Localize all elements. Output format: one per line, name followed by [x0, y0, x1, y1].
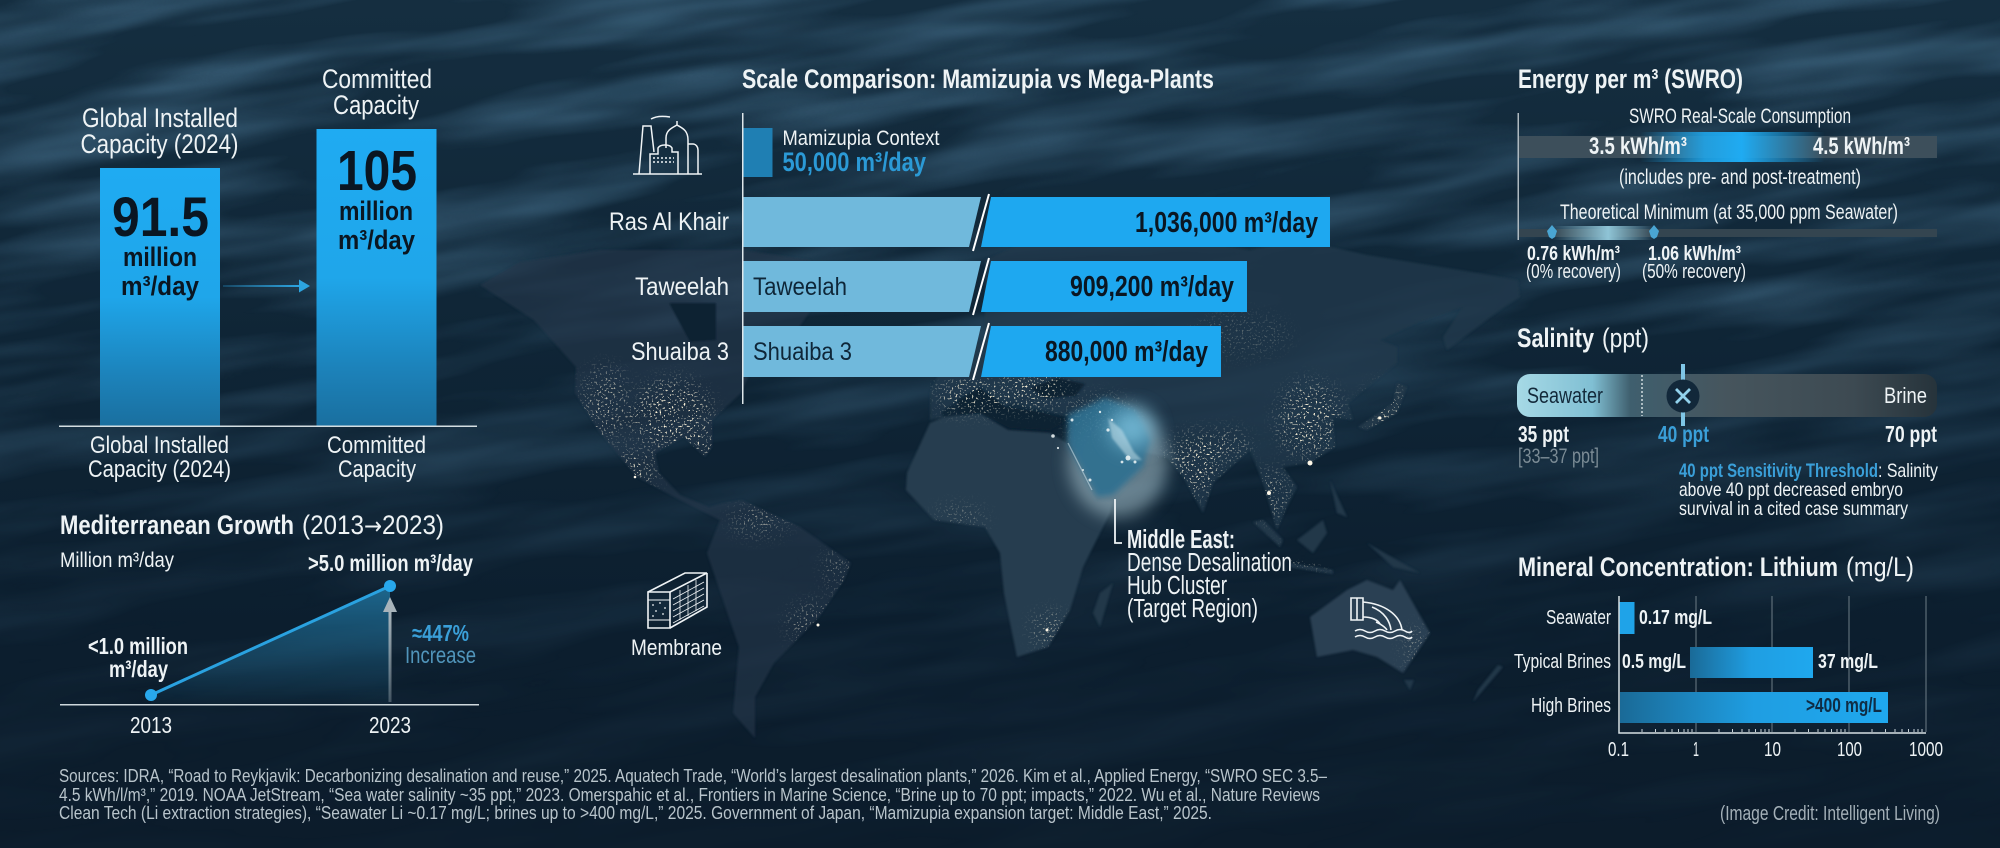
right panel: lithium concentration — [1514, 552, 1943, 761]
value labels: >5.0 million m³/day — [308, 550, 473, 576]
log bar chart: 1000 — [1909, 738, 1943, 761]
threshold note: above 40 ppt decreased embryo — [1679, 479, 1903, 501]
label above bar 1 — [80, 103, 238, 159]
increase callout: ≈447% — [412, 620, 469, 646]
bar: committed capacity: m³/day — [338, 225, 415, 255]
heading: Salinity — [1517, 323, 1594, 353]
label above bar 2: Committed — [322, 64, 432, 94]
increase callout: Increase — [405, 642, 476, 668]
log bar chart: 1 — [1693, 738, 1699, 761]
map: brightest cities — [634, 416, 1382, 632]
year labels — [130, 712, 411, 738]
log bar chart: High Brines — [1531, 694, 1611, 717]
bar: Mamizupia context — [744, 127, 940, 177]
callout: Middle East: Dense Desalination — [1127, 549, 1292, 577]
year labels: 2013 — [130, 712, 172, 738]
bar: Mamizupia context: 50,000 m³/day — [782, 147, 926, 177]
line chart — [60, 580, 479, 706]
log bar chart — [1514, 596, 1943, 761]
axis labels: Global Installed — [90, 432, 229, 459]
range bar: theoretical minimum: (0% recovery) — [1526, 260, 1621, 283]
scale value labels: 35 ppt — [1518, 421, 1569, 447]
log bar chart: Typical Brines — [1514, 650, 1611, 673]
threshold marker — [1666, 364, 1700, 426]
sources: Sources: IDRA, “Road to Reykjavik: Decarbonizing desalination and reuse,” 2025. Aquatech Trade, “World’s largest desalination plants,” 2026. Kim et al., Applied Energy, “SWRO SEC 3.5– — [59, 766, 1327, 786]
world map at night — [483, 247, 1512, 736]
range bar: theoretical minimum: (50% recovery) — [1642, 260, 1746, 283]
callout: Middle East: Hub Cluster — [1127, 572, 1227, 600]
range bar: theoretical minimum — [1519, 200, 1937, 283]
bar: Ras Al Khair: 1,036,000 m³/day — [1135, 207, 1318, 239]
range bar: theoretical minimum: 0.76 kWh/m³ — [1527, 242, 1620, 265]
axis labels — [88, 432, 426, 483]
scale value labels — [1518, 421, 1937, 468]
bar: global installed capacity: 91.5 — [112, 185, 209, 248]
left panel: capacity bar chart — [59, 64, 477, 483]
heading: Energy per m³ (SWRO) — [1518, 64, 1743, 94]
bar: Ras Al Khair — [609, 194, 1330, 251]
log bar chart: 0.1 — [1608, 738, 1629, 761]
icon: membrane: Membrane — [631, 635, 722, 660]
center panel: scale comparison — [609, 64, 1330, 404]
map: Middle East highlight glow — [1051, 398, 1168, 518]
bar: global installed capacity — [100, 168, 220, 426]
right panel: salinity — [1517, 323, 1938, 520]
heading: (2013→2023) — [302, 510, 444, 540]
range bar: theoretical minimum: 1.06 kWh/m³ — [1648, 242, 1741, 265]
range bar: real-scale consumption: 3.5 kWh/m³ — [1589, 133, 1687, 160]
bar: committed capacity: million — [339, 196, 413, 226]
icon: brine outfall pipe — [1351, 598, 1412, 638]
icon: desalination plant — [633, 116, 702, 174]
map: dark inland seas — [958, 378, 1085, 430]
increase callout — [405, 620, 476, 668]
label above bar 2: Capacity — [333, 90, 419, 120]
callout: Middle East — [1115, 499, 1292, 623]
log bar chart: 0.5 mg/L — [1622, 650, 1686, 673]
bar: Shuaiba 3: Shuaiba 3 — [631, 338, 729, 366]
range bar: real-scale consumption: SWRO Real-Scale Consumption — [1629, 104, 1851, 128]
map: city lights — [575, 308, 1430, 670]
label above bar 2 — [322, 64, 432, 120]
salinity gradient scale: Seawater — [1527, 383, 1603, 408]
left panel: Mediterranean growth — [60, 510, 479, 738]
bar: Taweelah — [635, 258, 1247, 315]
threshold note: : Salinity — [1878, 460, 1938, 482]
axis labels: Capacity — [338, 456, 417, 483]
bar: Taweelah: Taweelah — [753, 273, 847, 301]
arrow: growth between bars — [223, 280, 310, 292]
heading: (ppt) — [1602, 323, 1649, 353]
log bar chart: 37 mg/L — [1818, 650, 1878, 673]
salinity gradient scale — [1517, 374, 1937, 417]
threshold note — [1679, 460, 1938, 520]
scale value labels: 70 ppt — [1885, 421, 1937, 447]
range bar: real-scale consumption: 4.5 kWh/m³ — [1813, 133, 1910, 160]
value labels: <1.0 million — [88, 633, 188, 659]
log bar chart: 0.17 mg/L — [1639, 606, 1712, 629]
sources — [59, 766, 1327, 823]
bar: Shuaiba 3 — [631, 323, 1221, 380]
label above bar 1: Global Installed — [82, 103, 238, 133]
callout: Middle East: (Target Region) — [1127, 595, 1258, 623]
axis labels: Capacity (2024) — [88, 456, 231, 483]
threshold note: survival in a cited case summary — [1679, 498, 1908, 520]
heading: Scale Comparison: Mamizupia vs Mega-Plants — [742, 64, 1214, 94]
scale value labels: 40 ppt — [1658, 421, 1709, 447]
log bar chart: 100 — [1837, 738, 1862, 761]
right panel: energy per cubic metre — [1518, 64, 1937, 283]
bar: Taweelah: Taweelah — [635, 273, 729, 301]
bar: committed capacity: 105 — [337, 139, 417, 203]
bar: global installed capacity: million — [123, 242, 197, 272]
heading: Mediterranean Growth — [60, 510, 294, 540]
bar: Taweelah: 909,200 m³/day — [1070, 271, 1234, 303]
value labels — [88, 550, 473, 682]
icon: membrane — [631, 573, 722, 660]
heading: (mg/L) — [1846, 552, 1914, 582]
bar: Ras Al Khair: Ras Al Khair — [609, 208, 729, 236]
sources: 4.5 kWh/l/m³,” 2019. NOAA JetStream, “Sea water salinity ~35 ppt,” 2023. Omerspahic et al., Frontiers in Marine Science, “Brine up to 70 ppt; impacts,” 2022. Wu et al., Nature Reviews — [59, 785, 1320, 805]
range bar: real-scale consumption — [1519, 104, 1937, 189]
sources: Clean Tech (Li extraction strategies), “Seawater Li ~0.17 mg/L; brines up to >400 mg/L,” 2025. Government of Japan, “Mamizupia expansion target: Middle East,” 2025. — [59, 803, 1212, 823]
unit label: Million m³/day — [60, 549, 174, 572]
label above bar 1: Capacity (2024) — [80, 129, 238, 159]
axis labels: Committed — [327, 432, 426, 459]
log bar chart: Seawater — [1546, 606, 1611, 629]
year labels: 2023 — [369, 712, 411, 738]
bar: committed capacity — [316, 129, 436, 426]
map: landmasses — [480, 240, 1520, 738]
heading: Mineral Concentration: Lithium — [1518, 552, 1838, 582]
threshold note: 40 ppt Sensitivity Threshold — [1679, 460, 1878, 482]
callout: Middle East: Middle East: — [1127, 526, 1235, 554]
scale value labels: [33–37 ppt] — [1518, 445, 1599, 468]
log bar chart: 10 — [1764, 738, 1781, 761]
log bar chart: >400 mg/L — [1806, 694, 1882, 717]
value labels: m³/day — [109, 656, 168, 682]
salinity gradient scale: Brine — [1884, 383, 1927, 408]
range bar: real-scale consumption: (includes pre- and post-treatment) — [1619, 165, 1861, 189]
bar: Mamizupia context: Mamizupia Context — [782, 127, 940, 150]
bar: Shuaiba 3: Shuaiba 3 — [753, 338, 852, 366]
bar: Shuaiba 3: 880,000 m³/day — [1045, 336, 1208, 368]
bar: global installed capacity: m³/day — [121, 271, 199, 301]
